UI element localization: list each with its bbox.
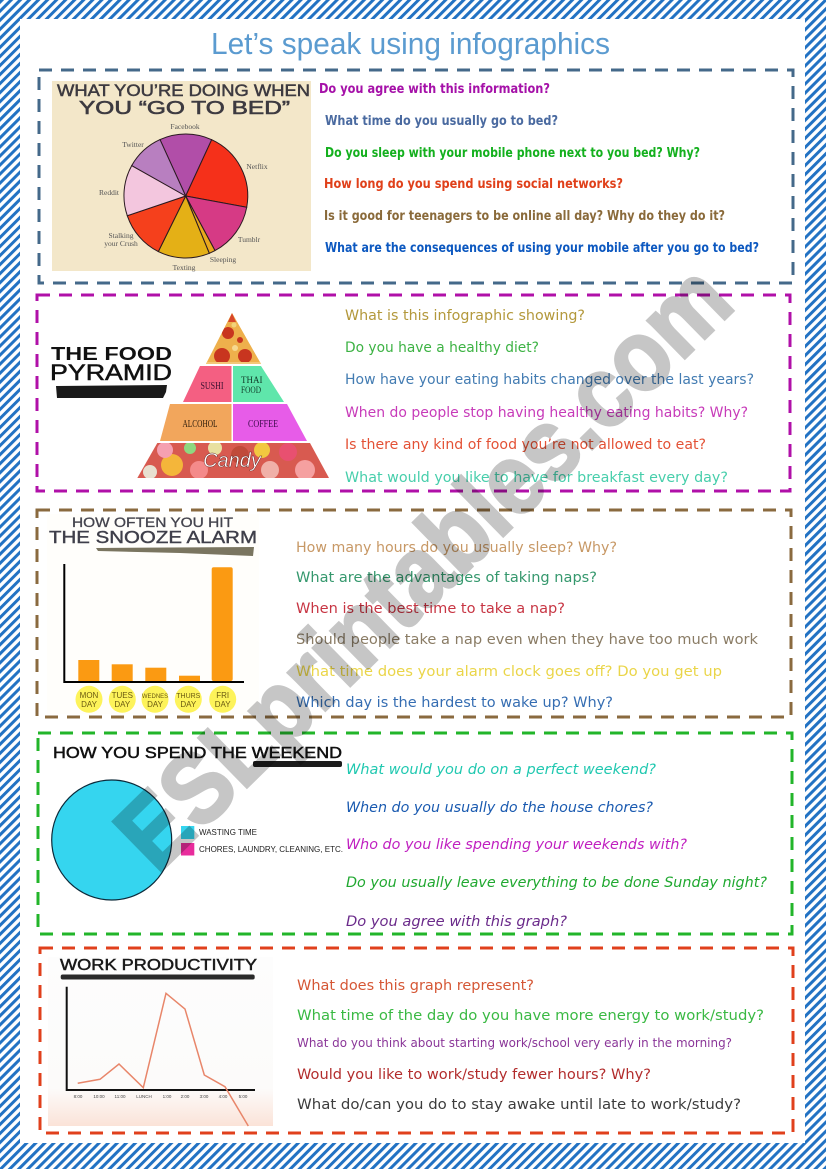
panel: weekend xyxy=(38,733,792,934)
line chart: work productivity xyxy=(48,957,273,1126)
food pyramid chart: THAI xyxy=(241,375,262,385)
food pyramid chart: Candy xyxy=(203,450,262,472)
food pyramid chart: FOOD xyxy=(241,385,261,395)
questions: go to bed: Is it good for teenagers to be online all day? Why do they do it? xyxy=(324,208,725,224)
pie chart: how you spend the weekend: HOW YOU SPEND THE WEEKEND xyxy=(53,745,342,762)
questions: snooze alarm: Should people take a nap even when they have too much work xyxy=(296,632,759,648)
questions: snooze alarm: How many hours do you usually sleep? Why? xyxy=(296,540,617,556)
food pyramid chart: SUSHI xyxy=(200,381,224,392)
bar chart: how often you hit the snooze alarm: DAY xyxy=(81,700,98,709)
bar chart: how often you hit the snooze alarm: MON xyxy=(80,691,99,700)
questions: go to bed: What time do you usually go to bed? xyxy=(325,113,558,129)
food pyramid chart: ALCOHOL xyxy=(182,418,218,430)
questions: weekend: Do you agree with this graph? xyxy=(346,914,568,930)
questions: work productivity: What do/can you do to stay awake until late to work/study? xyxy=(297,1097,741,1113)
bar chart: how often you hit the snooze alarm: THE SNOOZE ALARM xyxy=(49,527,257,547)
line chart: work productivity: 8:00 xyxy=(74,1094,83,1099)
line chart: work productivity: LUNCH xyxy=(136,1094,152,1099)
bar chart: how often you hit the snooze alarm: WEDNES xyxy=(142,694,168,700)
line chart: work productivity: 5:00 xyxy=(239,1094,248,1099)
line chart: work productivity: 2:00 xyxy=(181,1094,190,1099)
pie chart: how you spend the weekend: WASTING TIME xyxy=(199,828,257,837)
questions: food pyramid: What is this infographic showing? xyxy=(345,308,585,324)
bar chart: how often you hit the snooze alarm: TUES xyxy=(112,691,133,700)
questions: snooze alarm: When is the best time to take a nap? xyxy=(296,601,565,617)
bar chart: how often you hit the snooze alarm: DAY xyxy=(215,700,231,709)
questions: work productivity: What time of the day do you have more energy to work/study? xyxy=(297,1008,764,1024)
questions: food pyramid: How have your eating habits changed over the last years? xyxy=(345,372,754,388)
title: Let’s speak using infographics xyxy=(211,26,610,61)
pie chart infographic: what you're doing when you go to bed: Stalking xyxy=(108,231,134,240)
questions: work productivity xyxy=(297,978,764,1113)
bar chart: how often you hit the snooze alarm: FRI xyxy=(216,691,229,700)
panel: go to bed xyxy=(39,70,793,283)
pie chart infographic: what you're doing when you go to bed: Netflix xyxy=(246,162,268,171)
questions: food pyramid: Do you have a healthy diet? xyxy=(345,340,539,356)
pie chart: how you spend the weekend xyxy=(52,745,343,900)
pie chart infographic: what you're doing when you go to bed: Tumblr xyxy=(238,235,261,244)
bar chart: how often you hit the snooze alarm: DAY xyxy=(180,700,197,709)
bar chart: how often you hit the snooze alarm: HOW OFTEN YOU HIT xyxy=(72,515,233,530)
panel: work productivity xyxy=(40,948,793,1133)
panel: snooze alarm xyxy=(37,510,791,717)
pie chart infographic: what you're doing when you go to bed xyxy=(52,81,311,272)
pie chart infographic: what you're doing when you go to bed: YOU “GO TO BED” xyxy=(79,97,290,118)
line chart: work productivity: 3:00 xyxy=(200,1094,209,1099)
bar chart: how often you hit the snooze alarm: DAY xyxy=(114,700,131,709)
food pyramid chart xyxy=(130,310,335,480)
heading: the food pyramid: THE FOOD xyxy=(51,343,172,364)
questions: food pyramid xyxy=(345,308,754,486)
pie chart infographic: what you're doing when you go to bed: Facebook xyxy=(170,122,200,131)
bar chart: how often you hit the snooze alarm: DAY xyxy=(147,700,164,709)
questions: go to bed: How long do you spend using social networks? xyxy=(324,176,623,192)
pie chart infographic: what you're doing when you go to bed: Sleeping xyxy=(210,255,236,264)
questions: go to bed: Do you sleep with your mobile phone next to you bed? Why? xyxy=(325,145,700,161)
panel: food pyramid xyxy=(37,295,790,491)
questions: food pyramid: What would you like to have for breakfast every day? xyxy=(345,470,728,486)
questions: weekend: Do you usually leave everything to be done Sunday night? xyxy=(346,875,768,891)
watermark: ESLprintables.com xyxy=(94,243,753,891)
questions: snooze alarm xyxy=(296,540,759,711)
questions: go to bed: Do you agree with this information? xyxy=(319,81,550,97)
heading: the food pyramid xyxy=(50,343,172,398)
heading: the food pyramid: PYRAMID xyxy=(50,360,172,385)
line chart: work productivity: 11:00 xyxy=(115,1094,126,1099)
line chart: work productivity: 1:00 xyxy=(163,1094,172,1099)
pie chart infographic: what you're doing when you go to bed: Reddit xyxy=(99,188,120,197)
questions: work productivity: Would you like to work/study fewer hours? Why? xyxy=(297,1067,651,1083)
bar chart: how often you hit the snooze alarm: THURS xyxy=(176,693,201,700)
pie chart infographic: what you're doing when you go to bed: Texting xyxy=(173,263,196,272)
questions: weekend xyxy=(346,762,768,930)
questions: food pyramid: When do people stop having healthy eating habits? Why? xyxy=(345,405,748,421)
food pyramid chart: COFFEE xyxy=(248,418,278,430)
line chart: work productivity: WORK PRODUCTIVITY xyxy=(60,957,257,974)
line chart: work productivity: 10:00 xyxy=(93,1094,105,1099)
questions: weekend: Who do you like spending your weekends with? xyxy=(346,837,688,853)
pie chart infographic: what you're doing when you go to bed: Twitter xyxy=(122,140,144,149)
line chart: work productivity: 4:00 xyxy=(219,1094,228,1099)
questions: snooze alarm: What are the advantages of taking naps? xyxy=(296,570,597,586)
bar chart: how often you hit the snooze alarm xyxy=(47,514,259,714)
questions: snooze alarm: Which day is the hardest to wake up? Why? xyxy=(296,695,613,711)
questions: work productivity: What does this graph represent? xyxy=(297,978,534,994)
questions: snooze alarm: What time does your alarm clock goes off? Do you get up xyxy=(296,664,722,680)
pie chart: how you spend the weekend: CHORES, LAUNDRY, CLEANING, ETC. xyxy=(199,845,343,854)
questions: weekend: When do you usually do the house chores? xyxy=(346,800,654,816)
questions: work productivity: What do you think about starting work/school very early in the morning? xyxy=(297,1035,732,1050)
questions: weekend: What would you do on a perfect weekend? xyxy=(346,762,657,778)
pie chart infographic: what you're doing when you go to bed: WHAT YOU’RE DOING WHEN xyxy=(57,82,310,100)
pie chart infographic: what you're doing when you go to bed: your Crush xyxy=(104,239,138,248)
questions: food pyramid: Is there any kind of food you’re not allowed to eat? xyxy=(345,437,706,453)
questions: go to bed xyxy=(319,81,759,256)
